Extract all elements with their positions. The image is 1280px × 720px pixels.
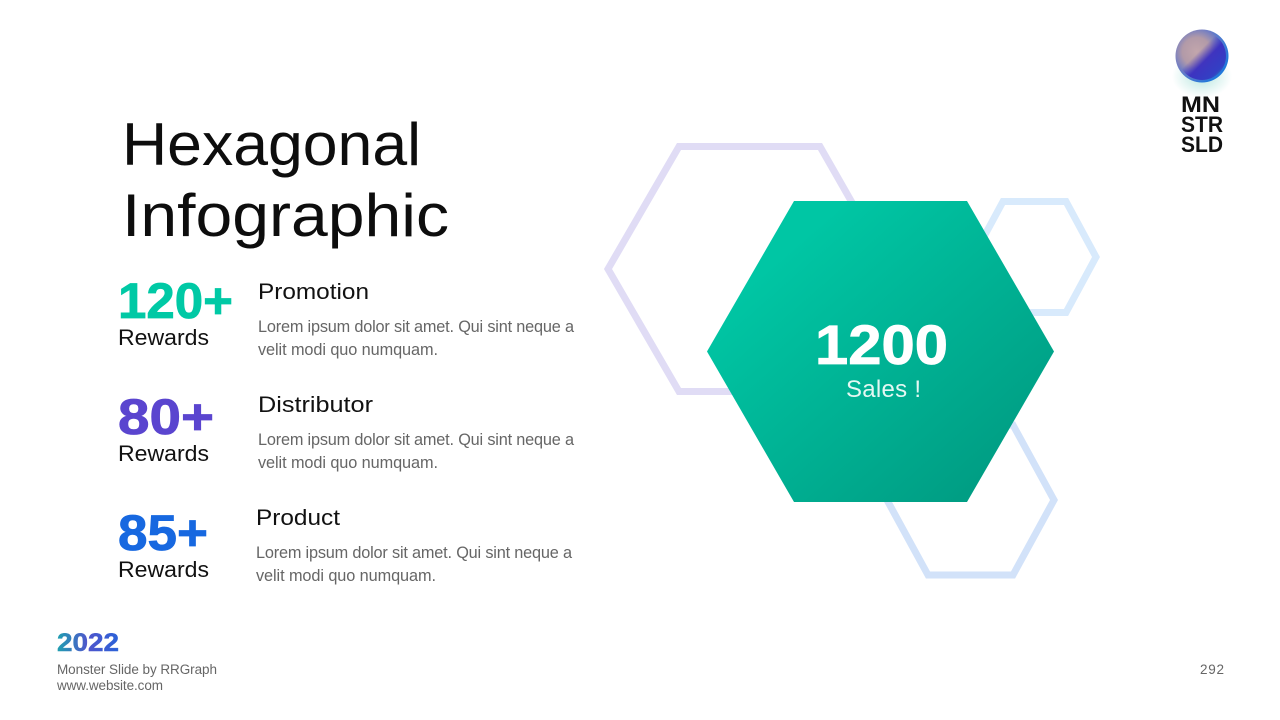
logo text: MN (1181, 92, 1220, 117)
title: Infographic (122, 182, 449, 249)
footer credit (56, 662, 217, 693)
stat row: product (118, 505, 573, 585)
body text: promotion: Lorem ipsum dolor sit amet. Qui sint neque a (258, 318, 575, 336)
heading: promotion: Promotion (258, 279, 369, 304)
stat: 120+ rewards: 120+ (118, 273, 233, 329)
value: 1200: 1200 (815, 313, 948, 376)
stat: 85+ rewards: 85+ (118, 505, 208, 561)
logo text (1181, 92, 1223, 157)
body text: distributor: Lorem ipsum dolor sit amet. Qui sint neque a (258, 431, 575, 449)
stat: 80+ rewards: Rewards (118, 441, 209, 466)
stat: 85+ rewards (118, 505, 209, 582)
icon: sphere (1172, 30, 1232, 98)
hexagon outline: purple (608, 146, 890, 392)
stat row: promotion (118, 273, 575, 359)
hexagon outline: light blue small (973, 202, 1096, 312)
heading: product: Product (256, 505, 340, 530)
body text: promotion: velit modi quo numquam. (258, 341, 438, 359)
body text: distributor (258, 431, 575, 472)
footer credit: Monster Slide by RRGraph (57, 662, 217, 677)
stat: 120+ rewards: Rewards (118, 325, 209, 350)
stat: 85+ rewards: Rewards (118, 557, 209, 582)
body text: promotion (258, 318, 575, 359)
hexagon outline: blue lower (887, 425, 1054, 575)
logo text: SLD (1181, 132, 1223, 157)
stat row: distributor (118, 389, 575, 472)
logo text: STR (1181, 112, 1223, 137)
title (122, 111, 449, 249)
body text: product: Lorem ipsum dolor sit amet. Qui sint neque a (256, 544, 573, 562)
page number: 292 (1200, 662, 1224, 677)
body text: product (256, 544, 573, 585)
year: 2022 (57, 629, 119, 657)
footer credit: www.website.com (56, 678, 163, 693)
title: Hexagonal (122, 111, 421, 178)
logo (1172, 30, 1232, 157)
body text: distributor: velit modi quo numquam. (258, 454, 438, 472)
central hexagon (707, 201, 1054, 502)
stat: 80+ rewards (118, 389, 214, 466)
footer (56, 629, 217, 693)
label: sales: Sales ! (846, 376, 921, 403)
stat: 80+ rewards: 80+ (118, 389, 214, 445)
heading: distributor: Distributor (258, 392, 373, 417)
body text: product: velit modi quo numquam. (256, 567, 436, 585)
